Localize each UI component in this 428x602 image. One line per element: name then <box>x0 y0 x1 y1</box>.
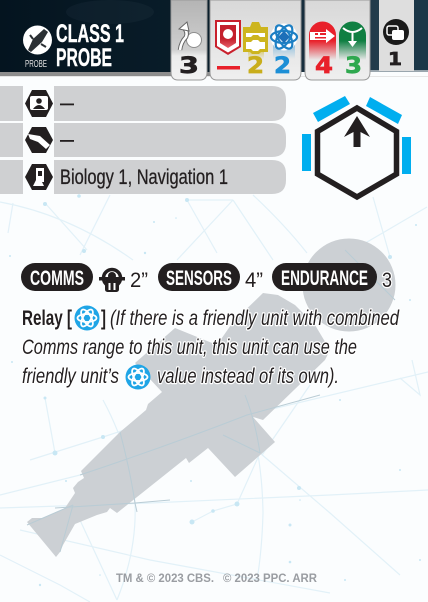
weapon value: none <box>217 66 240 70</box>
sensors pill: SENSORS <box>166 267 232 290</box>
special rule text <box>22 306 400 390</box>
arc: right <box>402 137 411 174</box>
ship surface map lines <box>27 250 395 552</box>
crew row: skills <box>0 160 286 194</box>
endurance pill: ENDURANCE <box>281 267 368 290</box>
value: blue: 2 <box>274 54 291 79</box>
attack value: 4 <box>315 54 333 79</box>
title: PROBE <box>56 44 112 72</box>
sensors value: 4” <box>245 269 263 292</box>
firing arc diagram <box>302 96 411 197</box>
tab: combat stats <box>305 0 370 80</box>
officer value <box>60 104 74 105</box>
arc: hexagon <box>318 108 396 197</box>
endurance pill <box>272 263 377 291</box>
ship silhouette <box>27 238 396 557</box>
icon: atom inline 2 <box>126 364 150 390</box>
icon: probe class <box>23 26 52 54</box>
comms value: 2” <box>130 269 148 292</box>
crew row: officers <box>0 86 286 121</box>
stat line: comms, sensors, endurance <box>21 263 392 292</box>
skills value: Biology 1, Navigation 1 <box>60 166 228 189</box>
icon: speed <box>179 22 202 50</box>
value: yellow: 2 <box>247 54 264 79</box>
icon: atom inline <box>74 306 100 330</box>
count value: 1 <box>388 49 402 70</box>
speed value: 3 <box>179 54 199 79</box>
icon: attack <box>309 22 336 60</box>
icon: gear <box>243 22 268 59</box>
arc: left <box>302 134 311 171</box>
arc: forward arrow <box>344 116 370 147</box>
tab: defense stats <box>210 0 301 80</box>
copyright <box>116 573 318 585</box>
header band <box>0 0 428 77</box>
systems value <box>60 140 74 142</box>
copyright: © 2023 PPC. ARR <box>223 573 318 585</box>
background star map <box>0 195 428 602</box>
tab: speed <box>171 0 207 80</box>
rule line 3 end: value instead of its own). <box>157 365 339 388</box>
rule bracket close: ] <box>101 307 106 330</box>
title: CLASS 1 <box>56 20 124 48</box>
sensors pill <box>158 263 240 291</box>
title <box>56 20 124 72</box>
icon: defense <box>339 22 366 60</box>
rule line 3 start: friendly unit’s <box>22 365 119 388</box>
unit type label: PROBE <box>25 59 47 70</box>
rule name: Relay [ <box>22 307 72 330</box>
icon: ship systems <box>25 127 53 153</box>
arc: front left <box>313 96 350 122</box>
tab: unit count <box>379 0 414 71</box>
background stars <box>9 194 421 586</box>
icon: unit count <box>383 19 409 45</box>
crew row: ship systems <box>0 123 286 157</box>
endurance value: 3 <box>382 269 392 292</box>
defense value: 3 <box>345 54 362 79</box>
icon: skills <box>25 164 53 190</box>
comms pill <box>21 263 93 291</box>
icon: shield <box>215 20 241 55</box>
arc: front right <box>366 97 402 124</box>
icon: comms <box>99 270 125 292</box>
copyright: TM & © 2023 CBS. <box>116 573 214 585</box>
icon: atom <box>270 23 298 59</box>
comms pill: COMMS <box>30 267 84 290</box>
icon: officer <box>25 90 53 117</box>
